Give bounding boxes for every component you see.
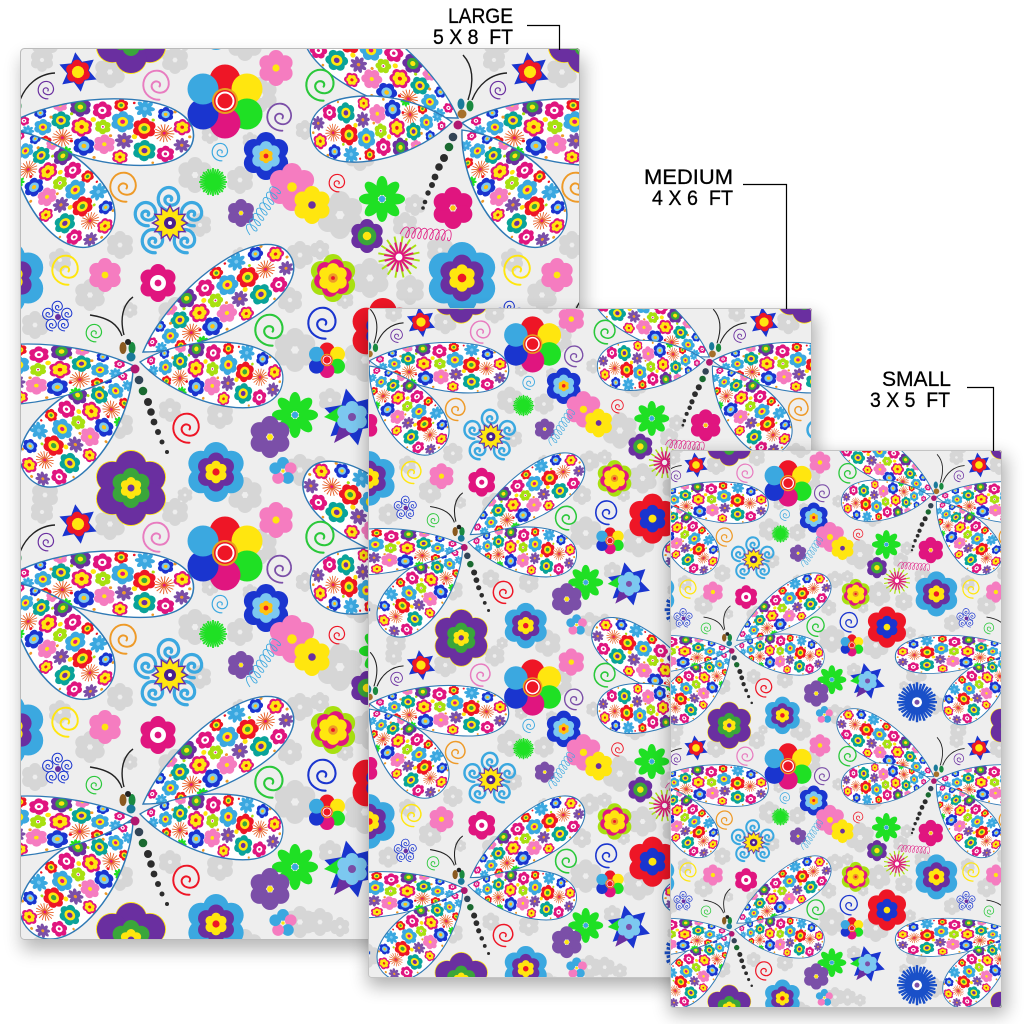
panel: medium rug (357, 305, 827, 997)
size label: small: SMALL (882, 368, 951, 391)
size label: small: 3 X 5 FT (870, 389, 950, 412)
size label: small (870, 368, 994, 451)
size label: medium: 4 X 6 FT (652, 187, 733, 210)
panel: small rug (659, 445, 1017, 1024)
size label: large: LARGE (448, 5, 513, 28)
size label: large: 5 X 8 FT (433, 26, 513, 49)
size label: medium (644, 166, 786, 309)
size label: large (433, 5, 560, 50)
size label: medium: MEDIUM (644, 166, 733, 189)
panel: large rug (12, 48, 594, 960)
